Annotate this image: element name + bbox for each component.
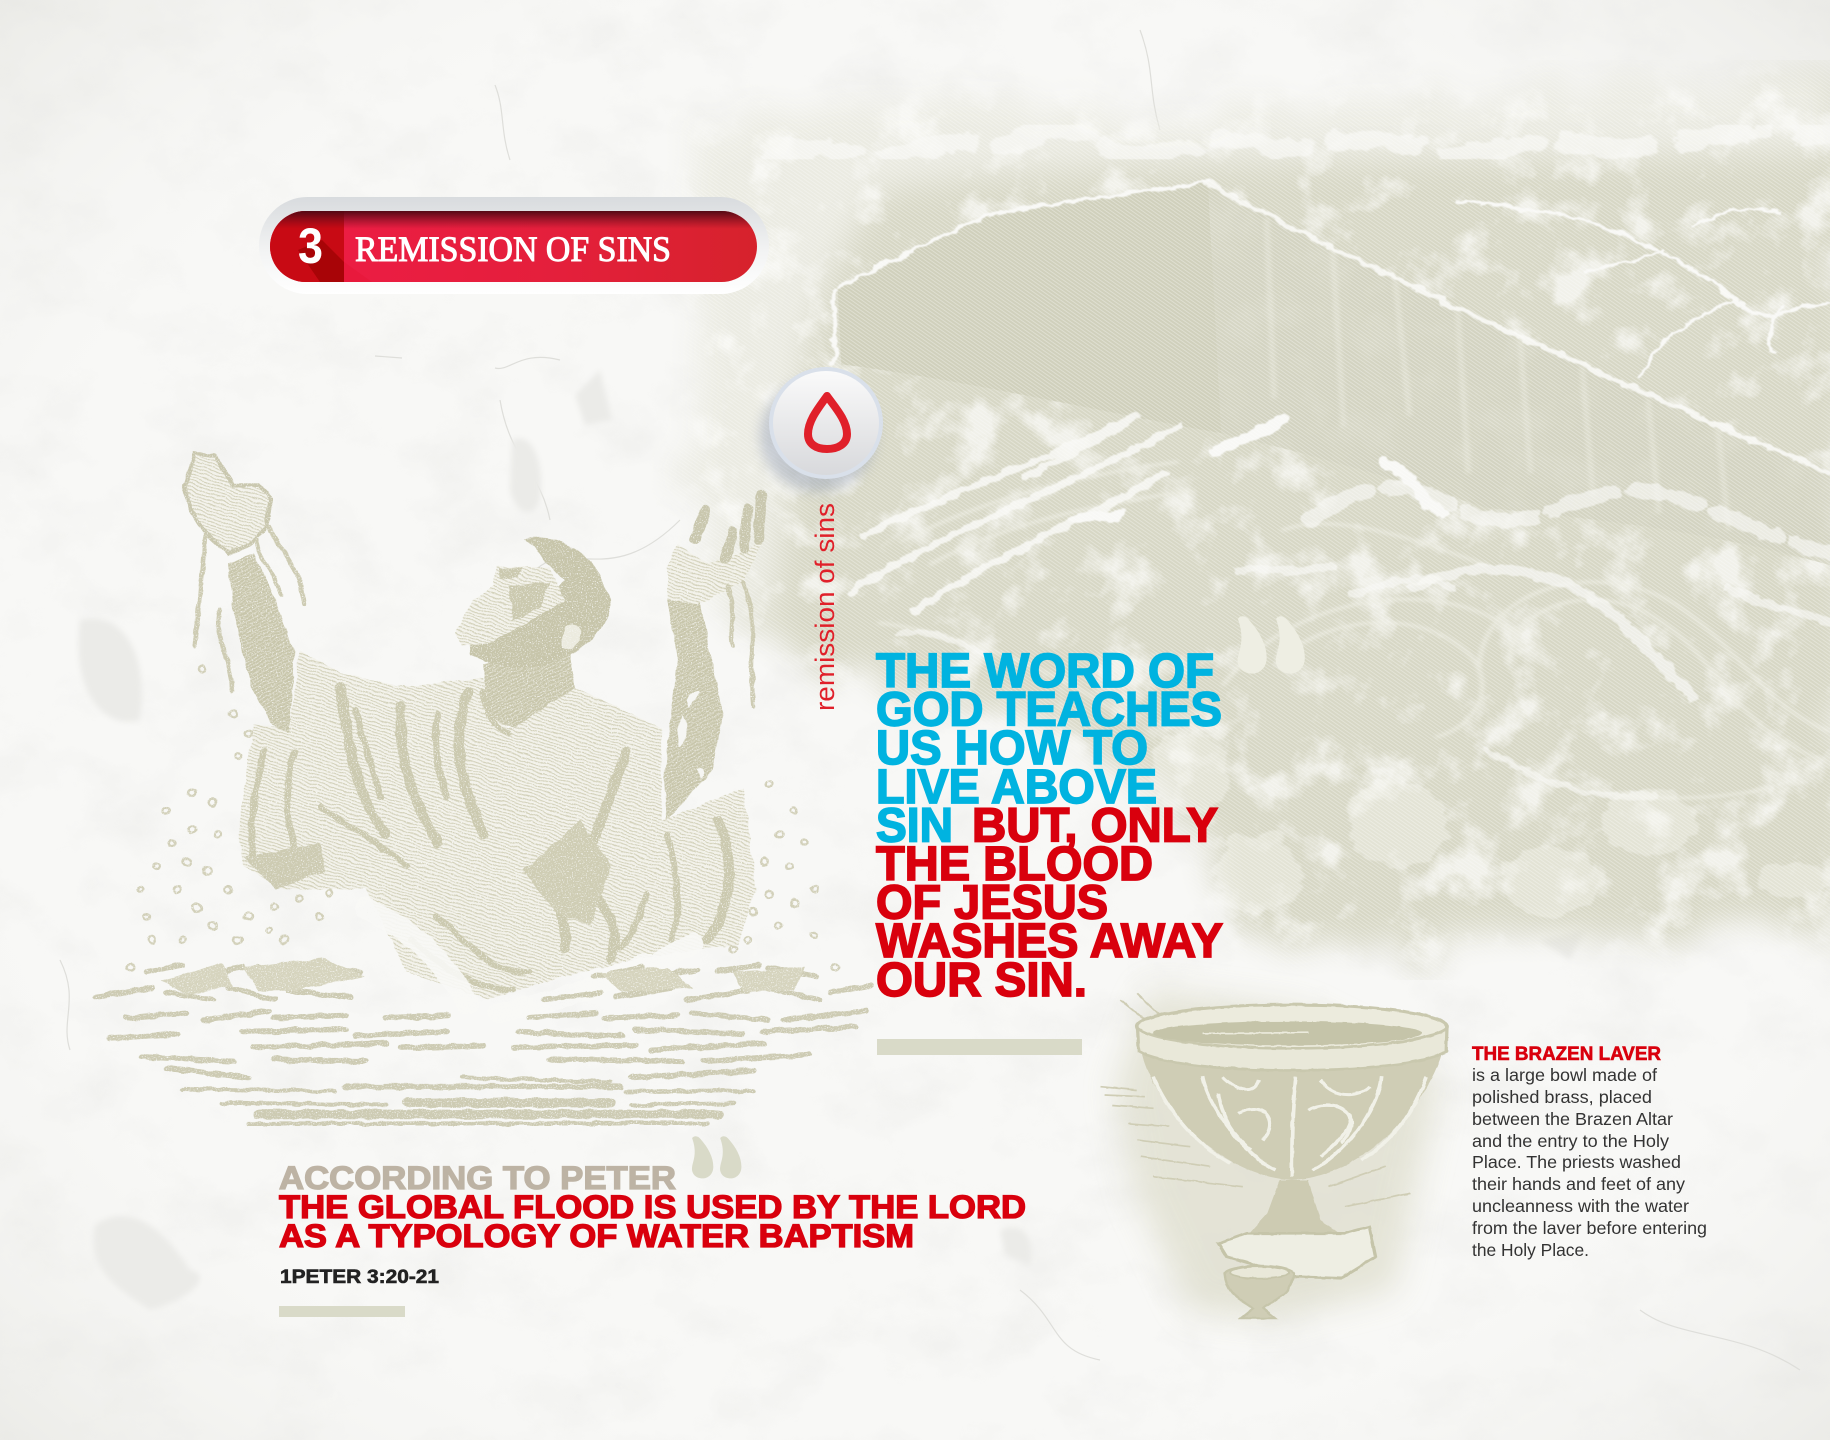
base — [1218, 1227, 1376, 1278]
robe folds — [251, 687, 729, 990]
stem — [1243, 1180, 1349, 1247]
right hand — [667, 540, 764, 604]
badge outer ring — [259, 197, 769, 294]
icon: blood drop button — [760, 367, 883, 492]
brazen laver description: uncleanness with the water — [1472, 1196, 1689, 1216]
headline statement: LIVE ABOVE — [876, 761, 1157, 814]
dripping water strands — [195, 526, 753, 706]
scripture reference: 1PETER 3:20-21 — [280, 1267, 439, 1288]
peter quote — [279, 1160, 1026, 1254]
headline statement: US HOW TO — [876, 722, 1148, 775]
bowl rim — [1137, 1005, 1447, 1049]
headline statement: THE BLOOD — [876, 838, 1153, 891]
ear — [562, 624, 582, 649]
right arm water highlights — [678, 690, 704, 779]
quote mark lower — [692, 1136, 741, 1178]
ark plank lines — [1267, 218, 1729, 531]
swirl lines — [878, 462, 1830, 798]
robe fade into water — [366, 908, 692, 1013]
right hand fingers — [695, 494, 761, 559]
headline statement — [876, 645, 1223, 1007]
brazen laver description: THE BRAZEN LAVER — [1472, 1044, 1661, 1065]
bowl ornament — [1153, 1077, 1427, 1177]
brazen laver description: from the laver before entering — [1472, 1218, 1707, 1238]
hatching behind bowl — [1100, 993, 1410, 1207]
water foam left and right — [162, 958, 804, 995]
halftone screen — [710, 75, 1830, 954]
hair and beard — [468, 537, 611, 667]
robe — [238, 650, 756, 999]
ark and waves — [838, 182, 1830, 798]
man rising from water — [95, 453, 871, 1123]
left hand — [185, 453, 271, 554]
laver illustration — [1100, 993, 1447, 1318]
peter quote: AS A TYPOLOGY OF WATER BAPTISM — [279, 1218, 914, 1254]
headline statement: OUR SIN. — [876, 954, 1087, 1007]
left arm — [228, 554, 294, 733]
brazen laver description — [1472, 1044, 1707, 1260]
brazen laver description: polished brass, placed — [1472, 1087, 1652, 1107]
laver halo — [1115, 990, 1440, 1320]
face shadow — [498, 568, 549, 621]
headline rule — [877, 1039, 1082, 1055]
headline statement: SIN — [876, 799, 953, 852]
brazen laver description: is a large bowl made of — [1472, 1065, 1657, 1085]
headline statement: GOD TEACHES — [876, 684, 1222, 737]
splash droplets — [127, 666, 839, 970]
foam puffs — [1149, 732, 1830, 915]
cloud band along top — [775, 127, 1830, 158]
face — [455, 565, 565, 646]
foam and lightning highlights — [833, 182, 1830, 796]
quote rule — [279, 1306, 405, 1317]
ark side hull — [1208, 182, 1830, 565]
peter quote: ACCORDING TO PETER — [279, 1160, 676, 1196]
badge number: 3 — [298, 218, 323, 274]
headline statement: OF JESUS — [876, 877, 1108, 930]
badge red pill — [270, 211, 757, 282]
right arm — [664, 591, 723, 820]
mottled wall over flood — [640, 60, 1830, 980]
water ripples — [95, 965, 871, 1123]
quote mark upper — [1238, 616, 1305, 674]
brazen laver description: between the Brazen Altar — [1472, 1109, 1673, 1129]
brazen laver description: Place. The priests washed — [1472, 1152, 1681, 1172]
water in bowl — [1153, 1021, 1422, 1045]
headline statement: WASHES AWAY — [876, 915, 1223, 968]
peter quote: THE GLOBAL FLOOD IS USED BY THE LORD — [279, 1189, 1026, 1225]
bowl body — [1141, 1050, 1443, 1180]
neck — [483, 650, 575, 728]
headline statement: THE WORD OF — [876, 645, 1214, 698]
small cup — [1225, 1266, 1294, 1318]
flood water tint — [640, 60, 1830, 980]
section title badge — [259, 197, 769, 294]
sleeve shade — [243, 843, 325, 889]
vertical label: remission of sins — [810, 503, 840, 711]
headline statement: BUT, ONLY — [972, 799, 1218, 852]
badge number block — [270, 211, 757, 282]
brazen laver description: and the entry to the Holy — [1472, 1131, 1669, 1151]
badge title: REMISSION OF SINS — [355, 229, 671, 269]
sky lighter zone — [660, 70, 1830, 620]
brazen laver description: the Holy Place. — [1472, 1240, 1589, 1260]
brazen laver description: their hands and feet of any — [1472, 1174, 1685, 1194]
flood and ark engraving — [640, 60, 1830, 980]
ark front face — [838, 182, 1221, 433]
